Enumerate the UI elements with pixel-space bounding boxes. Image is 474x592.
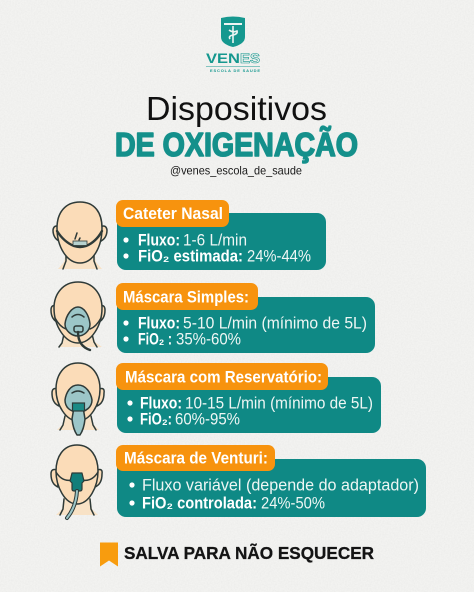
panel: Cateter Nasal: FiO₂ estimada: [138, 248, 243, 266]
handle: @venes_escola_de_saude [170, 164, 302, 178]
panel: Máscara Simples: FiO₂ : [138, 330, 172, 348]
icon: head with Venturi mask [51, 445, 102, 518]
panel: Máscara de Venturi: 24%-50% [261, 494, 325, 512]
panel: Cateter Nasal: 1-6 L/min [183, 232, 247, 250]
panel: Máscara de Venturi: FiO₂ controlada: [142, 494, 257, 512]
icon: head with simple mask [51, 282, 105, 350]
panel: Máscara Simples: 35%-60% [176, 330, 241, 348]
logo: Venes [206, 16, 260, 73]
panel: Máscara de Venturi: Máscara de Venturi: [124, 450, 268, 468]
panel: Máscara com Reservatório: FiO₂: [140, 410, 172, 428]
panel: Máscara com Reservatório [116, 363, 381, 433]
call to action: SALVA PARA NÃO ESQUECER [124, 542, 374, 563]
panel: Máscara Simples: Fluxo: [138, 314, 180, 332]
logo: Venes: VEN [206, 50, 240, 66]
title: Dispositivos [146, 90, 327, 127]
panel: Máscara com Reservatório: 60%-95% [175, 410, 240, 428]
panel: Máscara Simples: 5-10 L/min (mínimo de 5L) [183, 314, 367, 332]
panel: Cateter Nasal: 24%-44% [247, 248, 311, 266]
panel: Máscara com Reservatório: Máscara com Reservatório: [125, 368, 322, 386]
logo: Venes: ESCOLA DE SAUDE [210, 68, 260, 73]
panel: Máscara com Reservatório: Fluxo: [140, 394, 182, 412]
panel: Cateter Nasal: Fluxo: [138, 232, 180, 250]
panel: Cateter Nasal [116, 200, 326, 270]
logo: Venes: ES [240, 50, 260, 66]
title: DE OXIGENAÇÃO [115, 126, 358, 163]
panel: Cateter Nasal: Cateter Nasal [123, 205, 223, 223]
icon: bookmark [100, 542, 118, 566]
panel: Máscara com Reservatório: 10-15 L/min (mínimo de 5L) [185, 394, 373, 412]
panel: Máscara de Venturi [116, 445, 426, 517]
panel: Máscara de Venturi: Fluxo variável (depende do adaptador) [142, 476, 419, 494]
panel: Máscara Simples [116, 283, 375, 353]
title [115, 90, 358, 163]
icon: head with reservoir mask [52, 363, 104, 435]
icon: head with nasal cannula [53, 202, 107, 269]
panel: Máscara Simples: Máscara Simples: [123, 288, 249, 306]
